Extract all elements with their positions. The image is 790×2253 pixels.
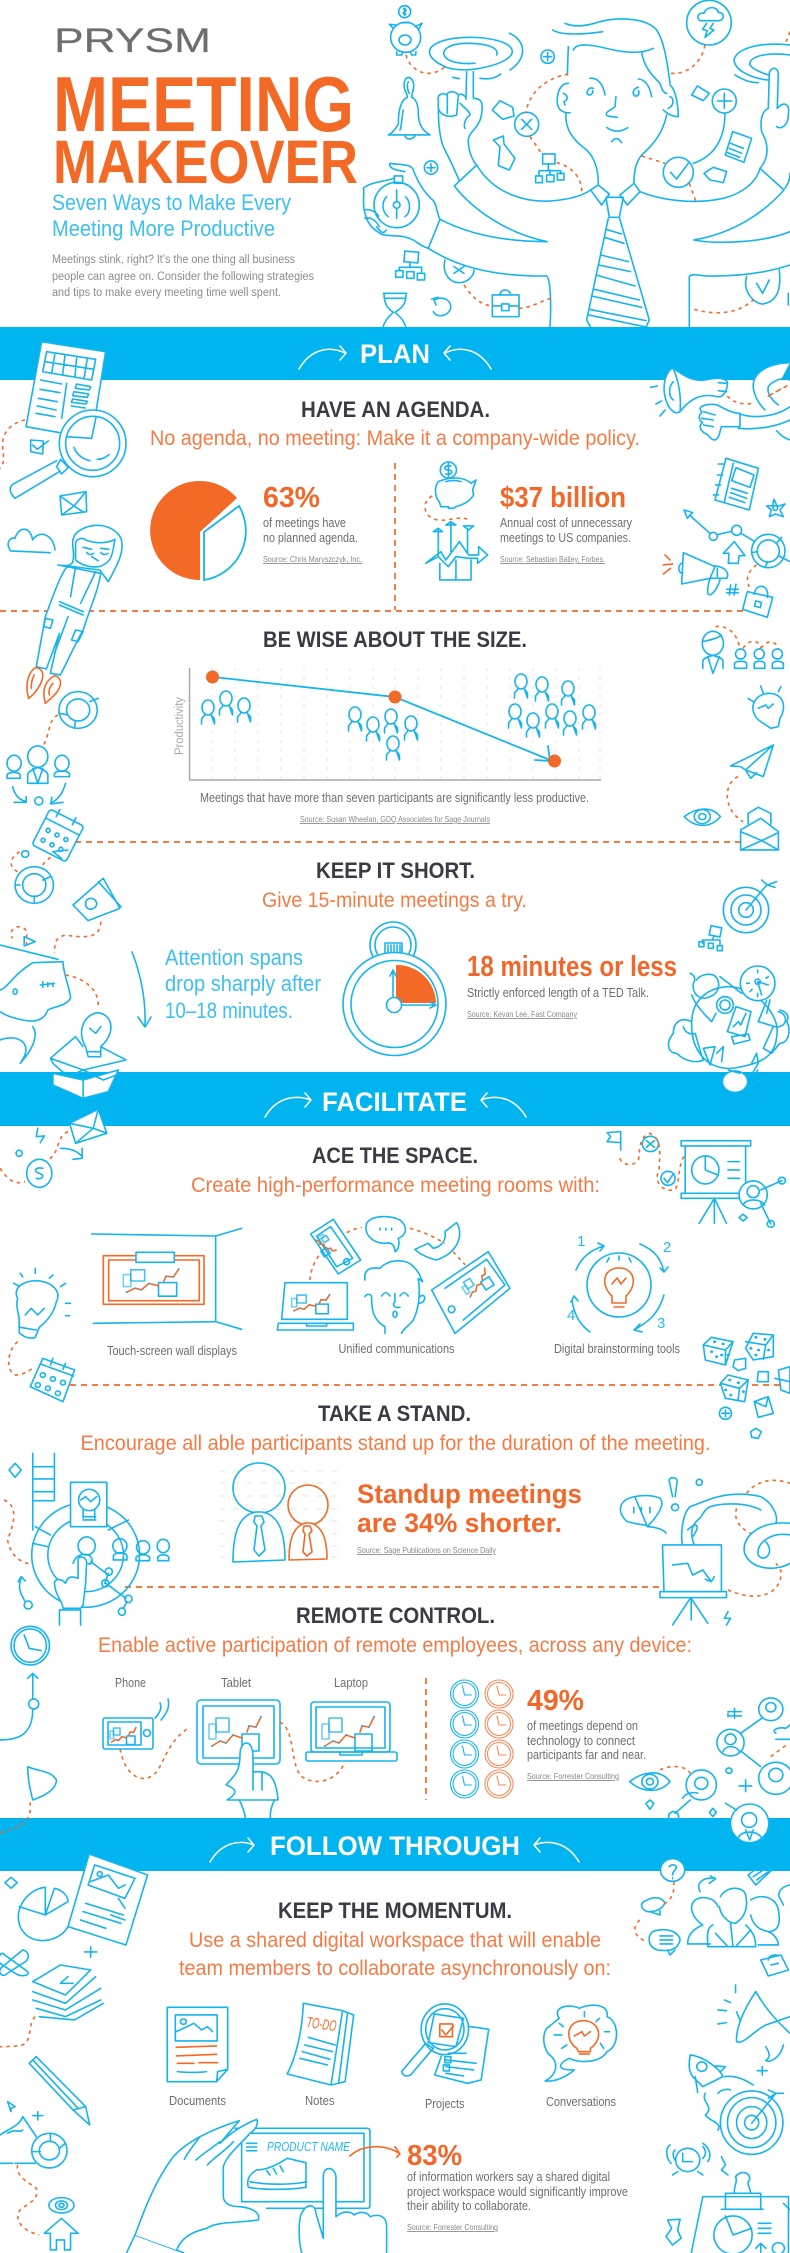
heading: follow through: FOLLOW THROUGH [270,1831,520,1861]
stat: 18 minutes: 18 minutes or less [467,951,677,983]
eye and house [49,2198,74,2213]
target-ring donut [59,692,97,728]
icon: notes [287,2003,354,2085]
brainstorming step numbers: 4 [567,1307,575,1324]
icon: tablet with pointing hand [197,1700,280,1800]
feature labels: Touch-screen wall displays [107,1343,237,1358]
stat: $37 billion: $37 billion [500,482,626,514]
icon: phone [103,1699,169,1749]
stat: 49%: participants far and near. [527,1747,646,1762]
device labels: Tablet [221,1675,251,1690]
decor: target, org chart and round table [669,880,789,1092]
clipboard [691,2197,790,2253]
heading: TAKE A STAND. [318,1401,471,1426]
title: Makeover: MAKEOVER [53,128,358,196]
icon: hands holding tablet [127,2119,400,2253]
handwritten label: to-do: TO-DO [305,2014,338,2035]
decor: right column follow through [635,1800,790,2253]
icon: projects magnifier [402,2004,489,2083]
agenda document [26,342,106,438]
pencil [29,2057,90,2125]
stat: 83%: of information workers say a shared digital [407,2169,610,2184]
magnifying glass [59,410,126,477]
arrow: attention drop [132,952,151,1027]
small megaphone [679,553,728,595]
checkbox [31,440,48,454]
icon: standing figures [233,1463,328,1562]
team of three [688,1888,756,1947]
envelope [70,1109,107,1143]
stat: $37 billion: Source: Sebastian Bailey, Forbes. [500,554,605,564]
logo: PRYSM: PRYSM [54,22,211,60]
icon: piggy bank and rising arrows [425,462,488,580]
stat: 49%: 49% [527,1685,584,1717]
brainstorming step numbers: 1 [577,1233,585,1250]
feature labels: Digital brainstorming tools [554,1341,680,1356]
businessman head [553,19,678,185]
alarm clock [676,2148,700,2172]
feature labels [107,1341,680,1358]
tip: be wise about the size [174,627,601,824]
brainstorming step numbers [567,1233,671,1332]
heading: follow through [210,1831,579,1862]
decor: calendar [32,805,86,862]
heading: plan: PLAN [360,339,430,369]
lightbulb and box [82,1013,111,1057]
heading: KEEP THE MOMENTUM. [278,1898,512,1923]
decor: left column wheel with hand [4,1453,169,1625]
tagline [179,1929,611,1980]
stat: 83% [407,2140,628,2232]
tip: ace the space [92,1143,680,1358]
tagline: Use a shared digital workspace that will enable [189,1929,601,1952]
stat: 49%: of meetings depend on [527,1718,638,1733]
participant icons [202,674,596,760]
decor: bottom of remote control sides [0,1626,790,1800]
workspace labels: Notes [305,2093,335,2108]
stat: 63%: of meetings have [263,515,346,530]
workspace labels [169,2093,616,2111]
stat: 83%: their ability to collaborate. [407,2198,531,2213]
caption: Meetings that have more than seven participants are significantly less productive. [200,790,589,805]
intro paragraph: and tips to make every meeting time well spent. [52,287,281,299]
mountain [0,2102,36,2137]
stat: 63% [263,482,362,564]
productivity chart [174,668,601,780]
workspace labels: Conversations [546,2094,616,2109]
tagline: Create high-performance meeting rooms with: [191,1174,600,1197]
tip: take a stand [80,1401,710,1562]
stat: $37 billion: meetings to US companies. [500,530,631,545]
workspace labels: Documents [169,2093,226,2108]
heading: ACE THE SPACE. [312,1143,478,1168]
stat: 18 minutes [467,951,677,1019]
stat: standup meetings: Standup meetings [357,1479,582,1509]
decor: right column plan [651,363,790,617]
decor: left column plan [0,342,126,553]
callout: attention spans [165,945,321,1023]
megaphone [736,1992,790,2061]
tip: keep the momentum [127,1898,628,2253]
icon: bell [388,77,430,139]
eye [684,809,720,825]
icon: document [167,2007,228,2082]
section band: plan [0,327,790,380]
hand and arm [699,404,790,440]
stat: standup meetings: Source: Sage Publications on Science Daily [357,1545,497,1555]
paper stack [33,1965,103,2020]
pie chart: 63% [150,481,246,580]
eye [630,1773,670,1790]
intro paragraph [52,254,314,299]
stat: 49%: technology to connect [527,1733,635,1748]
rocket [689,2055,725,2093]
decor: flag, presentation board [607,1132,785,1227]
title: Meeting: MEETING [53,60,354,148]
decor: left column lightbulb and calendar [9,1268,75,1402]
heading: facilitate [265,1087,526,1117]
intro paragraph: people can agree on. Consider the following strategies [52,271,314,283]
tip: keep it short [132,858,677,1056]
tagline: Encourage all able participants stand up for the duration of the meeting. [80,1432,710,1455]
heading: REMOTE CONTROL. [296,1603,495,1628]
top avatar and question bubble [731,1804,769,1843]
clock grid: 49% [450,1680,513,1798]
stopwatch in hand [374,176,419,228]
stat: 83%: Source: Forrester Consulting [407,2222,498,2232]
target [720,2091,783,2154]
floating meeting icons [383,0,780,328]
axis label: Productivity [174,697,186,755]
intro paragraph: Meetings stink, right? It’s the one thing all business [52,254,295,266]
briefcase [743,586,773,617]
envelope [741,818,778,850]
callout: attention spans: Attention spans [165,945,303,970]
heading: BE WISE ABOUT THE SIZE. [263,627,527,652]
decor: left column follow through [0,1800,275,2250]
notebook [713,458,758,510]
stat: 18 minutes: Strictly enforced length of a TED Talk. [467,985,649,1000]
thinking face [0,945,71,1063]
stat: 49%: Source: Forrester Consulting [527,1771,619,1781]
declining trend line [206,670,561,768]
tip: remote control [98,1603,692,1800]
label: product name: PRODUCT NAME [267,2139,350,2154]
device labels: Laptop [334,1675,368,1690]
report page [68,1854,148,1945]
arms and hands [363,33,790,327]
stat: 83%: project workspace would significantly improve [407,2184,628,2199]
lightbulb [748,686,784,728]
team people [28,746,48,767]
up arrow [723,542,745,563]
stat: 18 minutes: Source: Kevan Lee, Fast Company [467,1009,578,1019]
callout: attention spans: 10–18 minutes. [165,998,293,1023]
decor: left column keep it short [0,850,126,1187]
arrow graph [684,510,790,562]
tagline: Give 15-minute meetings a try. [262,889,527,912]
heading: KEEP IT SHORT. [316,858,475,883]
stat: 63%: 63% [263,482,320,514]
icon: stopwatch [343,922,446,1056]
brainstorming step numbers: 2 [663,1239,671,1256]
icon: conversation bubble with idea [544,2005,617,2081]
speech bubbles [642,1898,665,1915]
stat: 63%: no planned agenda. [263,530,358,545]
network [728,1708,742,1718]
device labels: Phone [115,1675,146,1690]
decor: flying woman [7,525,122,805]
section band: follow through [0,1818,790,1871]
icon: laptop [306,1702,397,1761]
icon: piggy bank [389,6,422,55]
paper plane [731,745,773,778]
heading: HAVE AN AGENDA. [301,397,490,422]
tip: have an agenda [150,397,640,610]
wall clock [11,1626,49,1665]
stat: 63%: Source: Chris Maryszczyk, Inc. [263,554,362,564]
feature labels: Unified communications [338,1341,455,1356]
icon: unified communications [277,1217,510,1333]
device labels [115,1675,368,1690]
tagline: Enable active participation of remote employees, across any device: [98,1634,692,1657]
striped tie and collar [587,183,649,327]
dashed connectors [406,32,790,313]
knot icon [0,1950,28,1976]
callout: attention spans: drop sharply after [165,971,321,996]
brainstorming step numbers: 3 [657,1315,665,1332]
workspace labels: Projects [425,2096,465,2111]
star [767,499,785,517]
donut [752,534,785,568]
pie chart [18,1887,68,1941]
cloud [8,529,55,553]
envelope [60,492,87,515]
source: Source: Susan Wheelan, GDQ Associates for Sage Journals [300,814,490,824]
subtitle [52,190,291,241]
subtitle: Seven Ways to Make Every [52,190,291,215]
stat: $37 billion: Annual cost of unnecessary [500,515,632,530]
heading: plan [299,339,491,369]
subtitle: Meeting More Productive [52,216,275,241]
stat: $37 billion [500,482,632,564]
round table meeting [692,987,777,1068]
tagline: team members to collaborate asynchronously on: [179,1957,611,1980]
raised megaphone [664,368,727,413]
icon: digital brainstorming [571,1243,668,1332]
heading: facilitate: FACILITATE [322,1087,467,1117]
stat: 83%: 83% [407,2140,462,2172]
stat: 49% [527,1685,646,1781]
tagline: No agenda, no meeting: Make it a company-wide policy. [150,427,640,450]
decor: right column presentation easel [620,1478,790,1625]
stat: standup meetings [357,1479,582,1555]
decor: right column dice [703,1333,790,1438]
section band: facilitate [0,1072,790,1126]
icon: touch-screen wall display [92,1228,242,1329]
illustration: multitasking businessman [363,0,790,328]
stat: standup meetings: are 34% shorter. [357,1508,562,1538]
decor: right column people and paper plane [684,626,784,850]
